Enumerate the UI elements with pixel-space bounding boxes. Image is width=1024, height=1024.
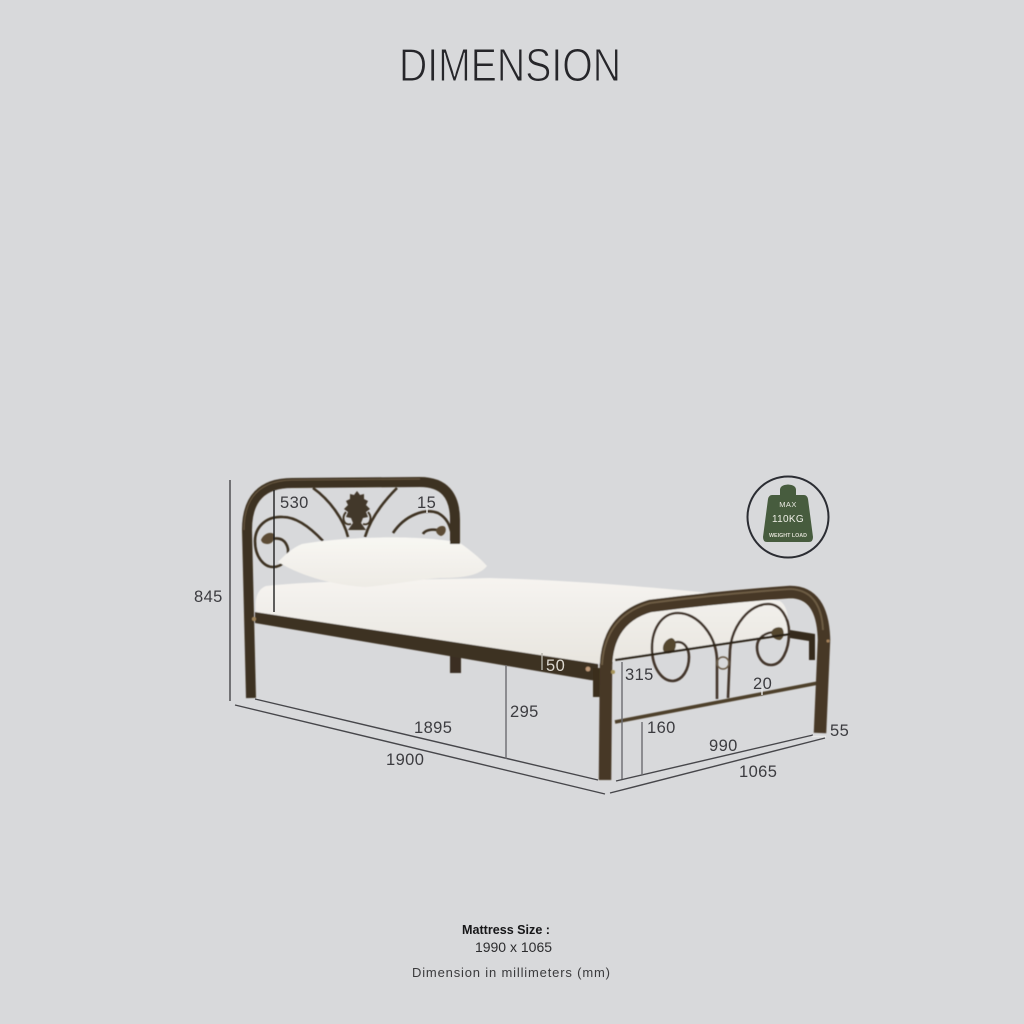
far foot bracket [790, 630, 815, 660]
label 55: 55 [830, 722, 849, 740]
icon: max weight load badge: WEIGHT LOAD [769, 533, 807, 539]
headboard leaf left [261, 533, 274, 544]
label 295: 295 [510, 703, 539, 721]
line 990 [616, 735, 813, 781]
label 1900: 1900 [386, 751, 424, 769]
label 15: 15 [417, 494, 436, 512]
rail bolts [252, 617, 590, 671]
label 160: 160 [647, 719, 676, 737]
label 990: 990 [709, 737, 738, 755]
bracket [593, 668, 600, 697]
headboard scrollwork [255, 488, 452, 567]
foot board tube [605, 592, 824, 780]
line 55 [812, 736, 826, 738]
label 1065: 1065 [739, 763, 777, 781]
dimension lines [230, 480, 826, 794]
headboard ornament [344, 491, 370, 530]
icon: max weight load badge: 110KG [772, 514, 804, 525]
foot cross rail behind [615, 634, 790, 660]
line 845 [229, 480, 231, 701]
mattress size heading: Mattress Size : [462, 922, 550, 937]
label 50: 50 [546, 657, 565, 675]
title: DIMENSION [399, 39, 621, 91]
line 1895 [255, 699, 598, 780]
line 50 [541, 653, 543, 670]
mattress size value: 1990 x 1065 [475, 939, 552, 955]
bed illustration [244, 479, 830, 780]
foot board leaves [663, 627, 784, 653]
units note: Dimension in millimeters (mm) [412, 965, 610, 980]
side rail [255, 612, 598, 681]
label 315: 315 [625, 666, 654, 684]
line 160 [641, 722, 643, 775]
icon: max weight load badge: MAX [779, 500, 797, 509]
line 1900 [235, 705, 605, 794]
label 530: 530 [280, 494, 309, 512]
line 20 [761, 687, 763, 695]
line 295 [505, 665, 507, 759]
far leg [450, 650, 461, 673]
headboard tube [247, 482, 455, 698]
dimension labels [194, 494, 849, 781]
label 1895: 1895 [414, 719, 452, 737]
mattress [256, 578, 788, 664]
label 20: 20 [753, 675, 772, 693]
line 315 [621, 662, 623, 779]
foot board lower rail [615, 683, 818, 722]
headboard leaf right [436, 526, 446, 536]
pillow [278, 537, 487, 587]
label 845: 845 [194, 588, 223, 606]
line 530 [273, 490, 275, 612]
line 15 [426, 508, 428, 513]
icon: max weight load badge [748, 476, 828, 558]
line 1065 [610, 738, 825, 793]
foot board rings [652, 604, 789, 699]
